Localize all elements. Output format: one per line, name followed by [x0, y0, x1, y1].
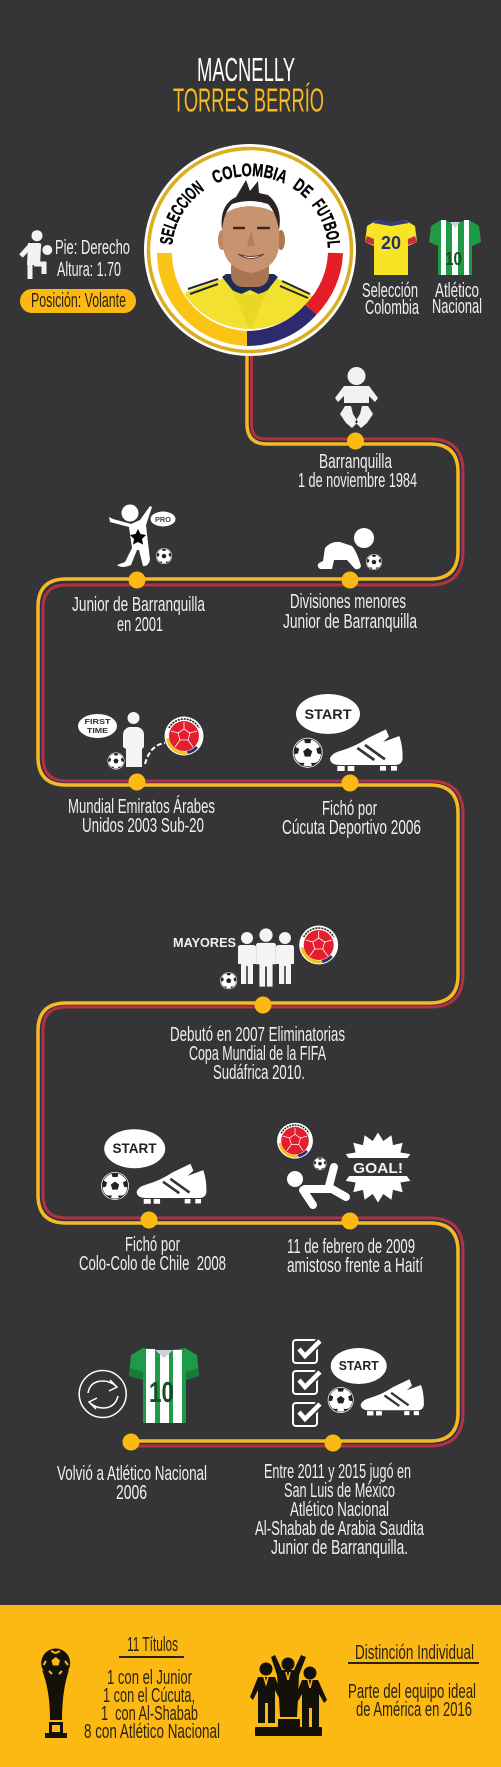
text: 11 de febrero [287, 1236, 423, 1277]
stats text: Altura: 1.70 [57, 259, 121, 281]
icon: baby [335, 367, 378, 428]
icon: first time: TIME [87, 726, 108, 735]
icon: mayores [173, 926, 338, 989]
icon: bicycle kick goal [277, 1123, 413, 1205]
text: birth: Barranquilla [319, 451, 393, 473]
stats text: Pie: Derecho [55, 237, 130, 259]
icon: start boot 1: START [304, 706, 352, 722]
icon: trophy [41, 1648, 70, 1738]
jersey: Selección Colombia: 20 [381, 233, 401, 253]
icon: start boot 2: START [112, 1141, 157, 1156]
jersey: Atlético Nacional: 10 [445, 249, 462, 269]
jersey captions: Selección [362, 280, 418, 302]
jersey captions: Atlético [435, 280, 479, 302]
stats text [55, 237, 130, 281]
text: Junior [72, 594, 206, 636]
icon: start boot 3 [328, 1348, 424, 1415]
text: debut [170, 1024, 345, 1084]
icon: pro player: PRO [155, 515, 171, 524]
text: career 2011-2015: Junior de Barranquilla. [271, 1537, 408, 1559]
text: mundial: Mundial Emiratos Árabes [68, 795, 215, 818]
text: mundial [68, 795, 215, 837]
text: divisiones menores: Junior de Barranquilla [283, 611, 418, 633]
timeline dots [122, 432, 364, 1452]
text: Junior: en 2001 [117, 614, 163, 636]
text: Junior: Junior de Barranquilla [72, 594, 206, 616]
icon: return arrows [79, 1370, 126, 1418]
text: Volvió: Volvió a Atlético Nacional [57, 1463, 207, 1485]
badge: player portrait [144, 144, 356, 356]
text: 11 títulos: 1 con el Junior [107, 1667, 192, 1689]
text: birth: 1 de noviembre 1984 [298, 470, 417, 492]
text: 11 títulos: 11 Títulos [127, 1634, 178, 1656]
position pill [20, 289, 136, 313]
icon: podium [250, 1655, 327, 1736]
icon: bicycle kick goal: GOAL! [353, 1160, 403, 1177]
icon: crawling baby [318, 528, 382, 570]
icon: start boot 3: START [339, 1359, 379, 1373]
icon: first time: FIRST [84, 717, 111, 726]
text: career 2011-2015: San Luis de México [284, 1480, 395, 1502]
timeline path [38, 355, 463, 1446]
icon: checklist [293, 1340, 320, 1426]
text: career 2011-2015: Atlético Nacional [290, 1499, 389, 1521]
icon: start boot 1 [293, 694, 403, 771]
text: Volvió [57, 1463, 207, 1504]
icon: pro player [109, 504, 176, 567]
text: 11 títulos: 1 con Al-Shabab [101, 1703, 198, 1725]
jersey: Atlético Nacional [429, 220, 481, 275]
text: 11 títulos: 8 con Atlético Nacional [84, 1721, 220, 1743]
text: Cúcuta: Cúcuta Deportivo 2006 [282, 817, 421, 839]
position pill: Posición: Volante [31, 290, 126, 312]
text: debut: Debutó en 2007 Eliminatorias [170, 1024, 345, 1046]
text: 11 de febrero: 11 de febrero de 2009 [287, 1236, 415, 1258]
text: debut: Sudáfrica 2010. [213, 1062, 305, 1084]
text: Colo-Colo [79, 1234, 226, 1275]
text: Colo-Colo: Colo-Colo de Chile 2008 [79, 1253, 226, 1275]
text: career 2011-2015 [255, 1461, 425, 1559]
text: birth [298, 451, 417, 492]
text: Cúcuta: Fichó por [322, 798, 377, 820]
icon: player kicking [21, 230, 52, 279]
title: MACNELLY [197, 52, 295, 89]
text: Cúcuta [282, 798, 421, 839]
text: Colo-Colo: Fichó por [125, 1234, 180, 1256]
icon: start boot 2 [101, 1129, 206, 1204]
badge arcs [164, 253, 247, 338]
panel: bottom achievements [0, 1605, 501, 1767]
jersey captions [362, 280, 482, 319]
text: divisiones menores [283, 591, 418, 633]
jersey: Atlético Nacional large: 10 [149, 1377, 174, 1409]
text: 11 de febrero: amistoso frente a Haití [287, 1255, 423, 1277]
badge text: SELECCION COLOMBIA DE FUTBOL [160, 163, 340, 248]
icon: mayores: MAYORES [173, 936, 236, 950]
text: career 2011-2015: Entre 2011 y 2015 jugó en [264, 1461, 411, 1483]
jersey captions: Colombia [365, 297, 420, 319]
text: 11 títulos: 1 con el Cúcuta, [103, 1685, 195, 1707]
title [173, 52, 324, 120]
text: Volvió: 2006 [116, 1482, 147, 1504]
jersey: Atlético Nacional large [129, 1348, 199, 1423]
text: debut: Copa Mundial de la FIFA [189, 1043, 326, 1065]
player photo [185, 180, 312, 329]
text: distinción individual [348, 1642, 479, 1721]
icon: first time [78, 712, 204, 770]
text: divisiones menores: Divisiones menores [290, 591, 406, 613]
jersey: Selección Colombia [365, 220, 417, 275]
title: TORRES BERRÍO [173, 82, 324, 120]
text: mundial: Unidos 2003 Sub-20 [82, 815, 204, 837]
text: 11 títulos [84, 1634, 220, 1743]
